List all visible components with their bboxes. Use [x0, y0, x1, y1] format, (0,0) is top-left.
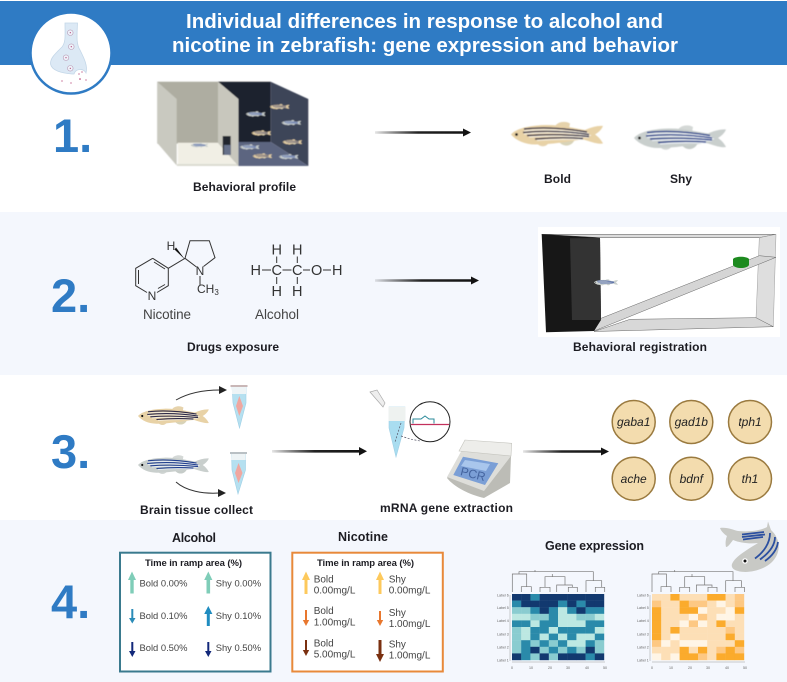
chemical structure: nicotine: N: [196, 264, 204, 278]
panel: nicotine results: Time in ramp area (%): [317, 558, 414, 569]
gene: bdnf: bdnf: [680, 472, 705, 486]
heatmap: alcohol gene expression: 50: [603, 666, 607, 670]
panel: nicotine results: Shy: [389, 608, 406, 619]
label: brain tissue collect: Brain tissue collect: [140, 503, 253, 517]
label: mRNA gene extraction: mRNA gene extraction: [380, 501, 513, 515]
panel: alcohol results: Shy 0.00%: [216, 578, 261, 588]
chemical structure: nicotine: CH: [197, 282, 214, 296]
tube: shy brain tissue: [230, 452, 247, 494]
chemical structure: nicotine: H: [167, 239, 175, 253]
heatmap: alcohol gene expression: 0: [511, 666, 513, 670]
gene: bdnf: [670, 457, 713, 500]
curved arrow: shy to tube: [176, 482, 226, 497]
label: behavioral registration: Behavioral registration: [573, 340, 707, 354]
heatmap: nicotine gene expression: 20: [688, 666, 692, 670]
heatmap: nicotine gene expression: 40: [725, 666, 729, 670]
band: step 2 background: [0, 212, 787, 375]
panel: nicotine results: 1.00mg/L: [314, 618, 356, 629]
panel: nicotine results: [292, 553, 443, 672]
heatmap: alcohol gene expression: Label 4: [497, 619, 509, 623]
chemical structure: ethanol: H: [332, 263, 343, 279]
label: drugs exposure: Drugs exposure: [187, 340, 279, 354]
gene: gaba1: gaba1: [617, 415, 650, 429]
heatmap: nicotine gene expression: 10: [669, 666, 673, 670]
heatmap: nicotine gene expression: Label 1: [637, 658, 649, 662]
magnifier: mRNA: [410, 402, 450, 442]
gene: ache: [612, 457, 655, 500]
label: alcohol: Alcohol: [255, 307, 299, 322]
chemical structure: ethanol: H: [271, 242, 282, 258]
light-dark box behavioral chamber: [157, 82, 308, 166]
label: nicotine: Nicotine: [143, 307, 191, 322]
heatmap: nicotine gene expression: 30: [706, 666, 710, 670]
number 3: 3.: [51, 425, 90, 478]
fish: shy: [634, 125, 726, 150]
number 1: 1.: [53, 109, 92, 162]
gene: gaba1: [612, 400, 655, 444]
heatmap: nicotine gene expression: [637, 570, 747, 670]
PCR machine: [447, 440, 512, 498]
chemical structure: nicotine: 3: [214, 288, 219, 297]
panel: nicotine results: Bold: [314, 574, 334, 585]
panel: alcohol results: Time in ramp area (%): [145, 558, 242, 569]
tube with mRNA magnifier: [370, 390, 450, 457]
title: Individual differences in response to alcohol and: [186, 10, 663, 33]
fish: shy donor: [138, 455, 209, 474]
panel: nicotine results: 1.00mg/L: [389, 619, 431, 630]
number 2: 2.: [51, 269, 90, 322]
green object on ramp: [733, 257, 749, 268]
label: shy: Shy: [670, 172, 692, 186]
icon: neuron synapse badge: [30, 12, 112, 94]
heatmap: nicotine gene expression: Label 3: [637, 632, 649, 636]
arrow: drugs to registration: [375, 276, 479, 284]
panel: nicotine results: Shy: [389, 639, 406, 650]
arrow: extraction to genes: [523, 448, 609, 456]
chemical structure: ethanol: C: [271, 263, 282, 279]
header bar: [0, 1, 787, 65]
chemical structure: ethanol: [250, 242, 343, 300]
icon: curled zebrafish: [720, 522, 779, 572]
heatmap: nicotine gene expression: Label 5: [637, 606, 649, 610]
heatmap: alcohol gene expression: Label 1: [497, 658, 509, 662]
heading: nicotine: Nicotine: [338, 530, 388, 544]
heatmap: nicotine gene expression: 50: [743, 666, 747, 670]
gene: th1: th1: [742, 472, 758, 486]
heatmap: nicotine gene expression: Label 2: [637, 646, 649, 650]
panel: nicotine results: 5.00mg/L: [314, 650, 356, 661]
chemical structure: ethanol: H: [292, 242, 303, 258]
chemical structure: nicotine: [136, 239, 219, 303]
chemical structure: ethanol: O: [311, 263, 322, 279]
chemical structure: ethanol: H: [271, 284, 282, 300]
panel: alcohol results: Bold 0.50%: [140, 642, 187, 653]
heatmap: alcohol gene expression: Label 6: [497, 594, 509, 598]
gene: tph1: tph1: [738, 415, 762, 429]
heatmap: nicotine gene expression: 0: [651, 666, 653, 670]
heading: gene expression: Gene expression: [545, 539, 644, 553]
heatmap: alcohol gene expression: Label 5: [497, 606, 509, 610]
title: nicotine in zebrafish: gene expression and behavior: [172, 34, 678, 57]
panel: nicotine results: 0.00mg/L: [389, 586, 431, 597]
gene: gad1b: gad1b: [675, 415, 708, 429]
chemical structure: nicotine: N: [148, 289, 156, 303]
heatmap: alcohol gene expression: 10: [529, 666, 533, 670]
panel: nicotine results: 1.00mg/L: [389, 651, 431, 662]
panel: nicotine results: Bold: [314, 606, 334, 617]
panel: alcohol results: Bold 0.00%: [140, 578, 187, 588]
chemical structure: ethanol: C: [292, 263, 303, 279]
curved arrow: bold to tube: [176, 386, 227, 400]
label: bold: Bold: [544, 172, 571, 186]
panel: nicotine results: Shy: [389, 574, 406, 585]
heatmap: alcohol gene expression: [497, 570, 607, 670]
gene: ache: ache: [621, 472, 647, 486]
heading: alcohol: Alcohol: [172, 531, 216, 545]
label: behavioral profile: Behavioral profile: [193, 180, 296, 194]
chemical structure: ethanol: H: [250, 263, 261, 279]
tube: bold brain tissue: [230, 385, 248, 428]
heatmap: alcohol gene expression: 20: [548, 666, 552, 670]
panel: alcohol results: Bold 0.10%: [140, 610, 187, 621]
fish: bold donor: [138, 406, 209, 425]
gene: gad1b: [670, 400, 713, 444]
arrow: profile to phenotypes: [375, 128, 471, 136]
heatmap: alcohol gene expression: 30: [566, 666, 570, 670]
number 4: 4.: [51, 575, 90, 628]
heatmap: nicotine gene expression: Label 6: [637, 594, 649, 598]
heatmap: alcohol gene expression: Label 2: [497, 646, 509, 650]
arrow: tissue to extraction: [272, 447, 367, 456]
panel: alcohol results: Shy 0.10%: [216, 610, 261, 621]
gene: tph1: [728, 400, 772, 444]
panel: nicotine results: Bold: [314, 638, 334, 649]
chemical structure: ethanol: H: [292, 284, 303, 300]
title: [172, 10, 678, 57]
panel: alcohol results: [120, 553, 270, 672]
panel: nicotine results: 0.00mg/L: [314, 586, 356, 597]
ramp tank apparatus: [538, 227, 780, 337]
fish: bold: [511, 122, 603, 146]
heatmap: nicotine gene expression: Label 4: [637, 619, 649, 623]
PCR machine: PCR: [459, 464, 487, 484]
band: step 4 background: [0, 520, 787, 682]
panel: alcohol results: Shy 0.50%: [216, 642, 261, 653]
heatmap: alcohol gene expression: Label 3: [497, 632, 509, 636]
gene: th1: [728, 457, 772, 500]
heatmap: alcohol gene expression: 40: [585, 666, 589, 670]
